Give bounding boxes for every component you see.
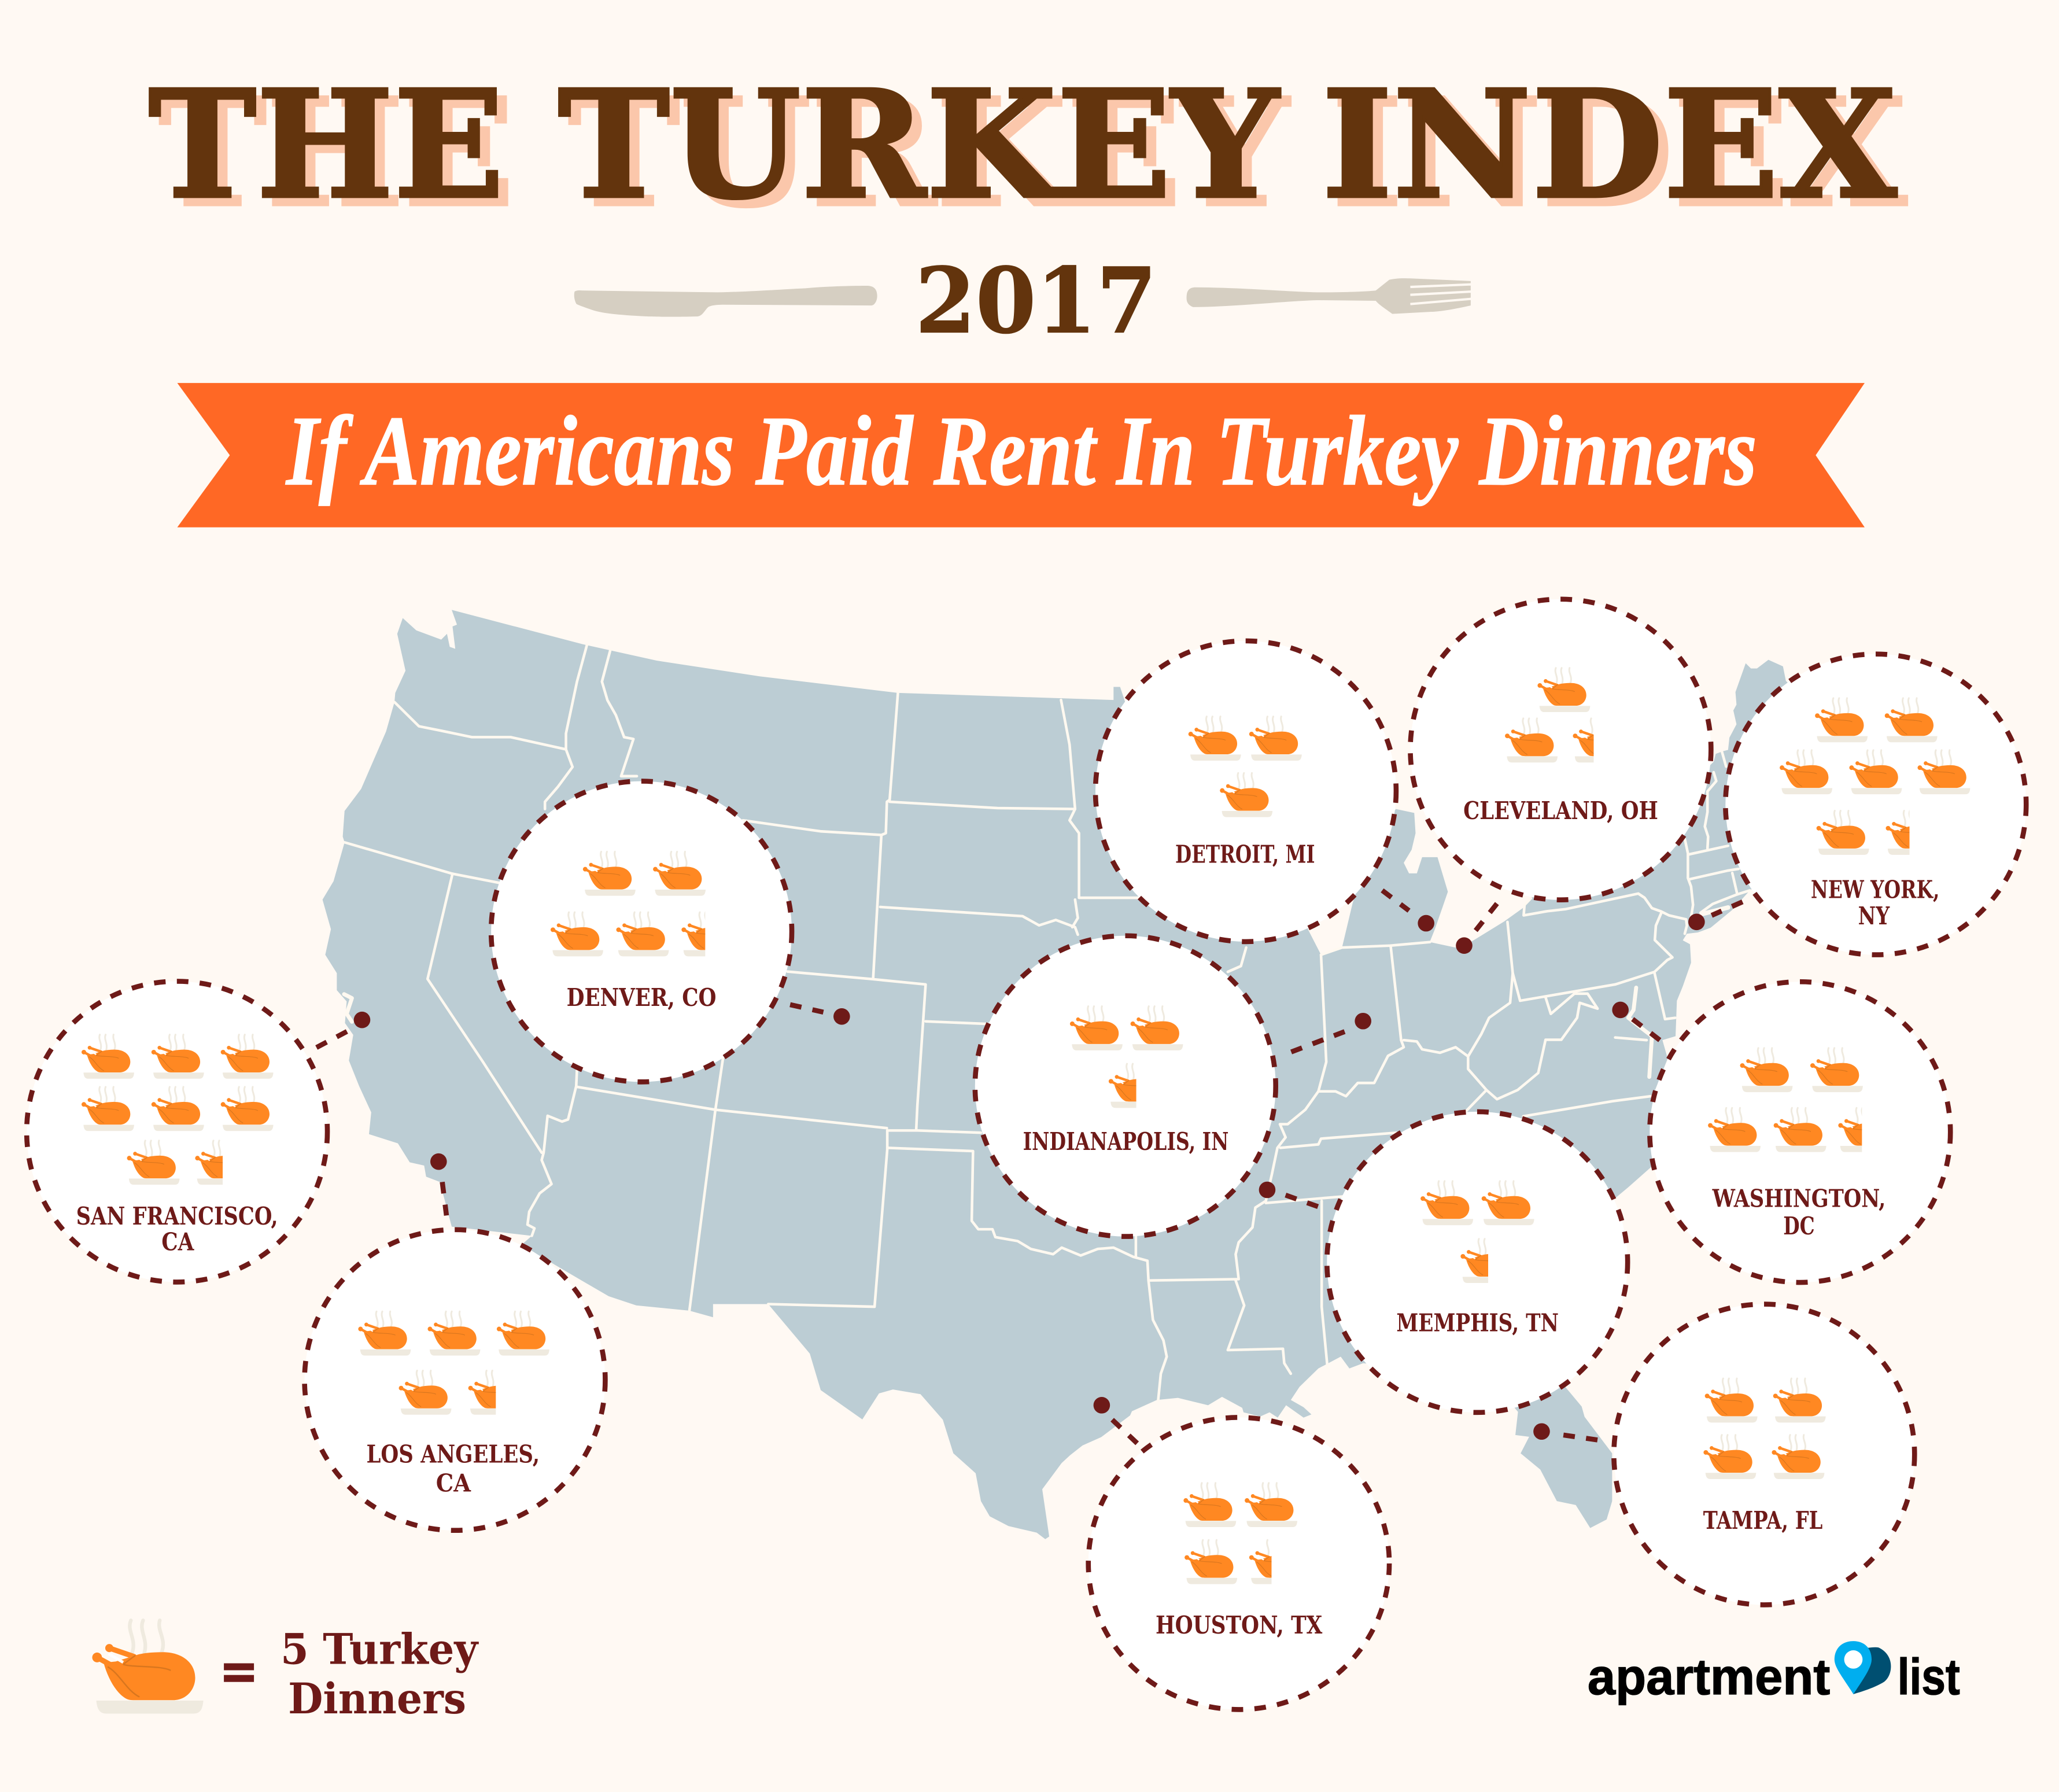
icon: knife [574,286,877,317]
title: TURKEY [568,65,1292,240]
panel: Los Angeles: LOS ANGELES, [366,1440,540,1469]
panel: New York [1725,654,2026,955]
map: United States [323,610,1839,1539]
title: INDEX [1332,65,1907,240]
panel: San Francisco [27,981,327,1282]
panel: Memphis [1327,1112,1628,1413]
panel: Tampa [1614,1304,1914,1605]
panel: Washington DC: WASHINGTON, [1712,1185,1885,1213]
logo: apartment list: apartment [1588,1648,1830,1705]
panel: Los Angeles [305,1230,605,1531]
logo: apartment list [1588,1641,1960,1705]
panel: Los Angeles: CA [436,1469,471,1497]
panel: Washington DC [1650,982,1950,1282]
panel: Detroit: DETROIT, MI [1175,840,1315,868]
panel: Tampa: TAMPA, FL [1703,1506,1822,1535]
title: THE [158,65,514,240]
logo: apartment list: list [1898,1648,1960,1705]
panel: Cleveland: CLEVELAND, OH [1463,797,1658,825]
panel: Memphis: MEMPHIS, TN [1396,1309,1559,1337]
panel: San Francisco: CA [161,1227,195,1256]
panel: Indianapolis: INDIANAPOLIS, IN [1023,1127,1228,1156]
panel: Denver [491,781,792,1082]
year: 2017 [915,248,1157,353]
panel: Cleveland [1410,599,1711,900]
title [149,57,1907,240]
icon: fork [1187,278,1472,314]
panel: New York: NEW YORK, [1811,876,1939,904]
banner subtitle: If Americans Paid Rent In Turkey Dinners [285,396,1757,506]
title: INDEX [1322,57,1898,232]
legend: Dinners [288,1675,466,1724]
leader lines and city dots [316,890,1743,1443]
panel: Houston [1088,1417,1389,1709]
banner [178,383,1865,528]
title: THE [149,57,504,232]
panel: Washington DC: DC [1783,1212,1815,1240]
panel: Denver: DENVER, CO [567,983,717,1012]
legend [92,1620,479,1724]
legend: 5 Turkey [281,1625,479,1675]
panel: Detroit [1095,641,1396,942]
panel: New York: NY [1858,902,1890,930]
panel: Indianapolis [975,936,1276,1237]
panel: Houston: HOUSTON, TX [1156,1611,1323,1639]
title: TURKEY [558,57,1282,232]
panel: San Francisco: SAN FRANCISCO, [76,1202,278,1230]
